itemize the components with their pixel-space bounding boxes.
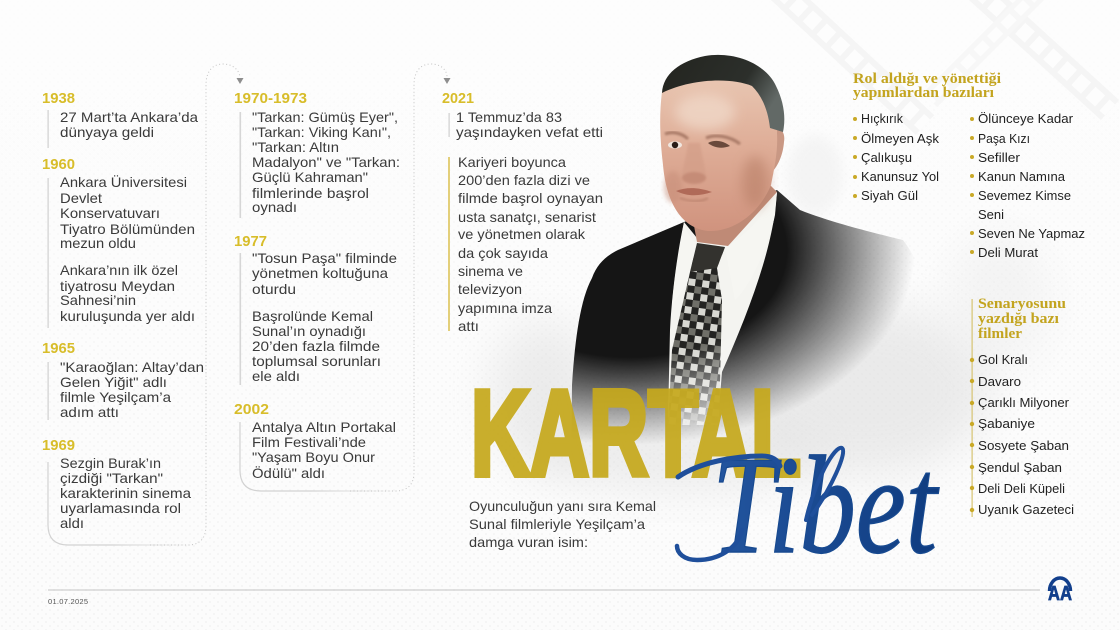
- film list column 2: Kanun Namına: [978, 169, 1066, 184]
- timeline entry 1977: "Tosun Paşa" filminde: [252, 251, 397, 266]
- film list column 2: Seven Ne Yapmaz: [978, 226, 1085, 241]
- timeline entry 1977: 20’den fazla filmde: [252, 339, 380, 354]
- footer date and rule: 01.07.2025: [48, 597, 88, 606]
- timeline entry 1938: [42, 91, 198, 148]
- film list column 2: Deli Murat: [978, 245, 1038, 260]
- timeline entry 1977: toplumsal sorunları: [252, 354, 381, 369]
- panel: screenplays: Deli Deli Küpeli: [978, 481, 1065, 496]
- timeline entry 1970-1973: oynadı: [252, 200, 297, 215]
- panel: screenplays: Sosyete Şaban: [978, 438, 1069, 453]
- timeline entry 1965: "Karaoğlan: Altay’dan: [60, 360, 204, 375]
- timeline entry 1977: oturdu: [252, 282, 296, 297]
- career summary: televizyon: [458, 282, 522, 297]
- timeline entry 1969: Sezgin Burak’ın: [60, 456, 161, 471]
- timeline entry 1960: kuruluşunda yer aldı: [60, 309, 195, 324]
- icon: AA logo: AA: [1048, 583, 1072, 605]
- timeline entry 1938: 1938: [42, 91, 75, 107]
- timeline entry 1960: [42, 157, 195, 328]
- timeline entry 1969: uyarlamasında rol: [60, 501, 181, 516]
- timeline entry 1970-1973: [234, 91, 400, 218]
- career summary: 200’den fazla dizi ve: [458, 173, 590, 188]
- panel: screenplays: [970, 296, 1074, 517]
- career summary: ve yönetmen olarak: [458, 227, 585, 242]
- timeline entry 2002: "Yaşam Boyu Onur: [252, 450, 375, 465]
- timeline entry 1960: Sahnesi’nin: [60, 293, 136, 308]
- subtitle: Sunal filmleriyle Yeşilçam’a: [469, 517, 645, 532]
- shirt: [668, 192, 777, 396]
- timeline entry 1969: 1969: [42, 438, 75, 454]
- neck: [692, 180, 777, 246]
- script flourishes: [677, 448, 843, 560]
- film list column 1: Kanunsuz Yol: [861, 169, 939, 184]
- film list column 2: Sefiller: [978, 150, 1021, 165]
- film list column 2: Seni: [978, 207, 1004, 222]
- timeline entry 1965: Gelen Yiğit" adlı: [60, 375, 167, 390]
- career summary: attı: [458, 319, 479, 334]
- timeline entry 2002: Film Festivali’nde: [252, 435, 366, 450]
- timeline connector 1: [48, 64, 244, 545]
- timeline entry 1977: yönetmen koltuğuna: [252, 266, 388, 281]
- heading: films acted and directed: yapımlardan bazıları: [853, 85, 994, 101]
- timeline entry 1970-1973: filmlerinde başrol: [252, 186, 369, 201]
- hair: [662, 55, 784, 132]
- panel: screenplays: Çarıklı Milyoner: [978, 395, 1070, 410]
- film list column 1: Hıçkırık: [861, 111, 903, 126]
- icon: AA logo: [1048, 578, 1072, 605]
- film list column 1: Siyah Gül: [861, 188, 918, 203]
- timeline entry 2021: [442, 91, 603, 140]
- career summary: Kariyeri boyunca: [458, 155, 566, 170]
- timeline entry 2002: Ödülü" aldı: [252, 464, 325, 481]
- timeline entry 2021: 2021: [442, 91, 474, 107]
- timeline entry 1965: adım attı: [60, 405, 119, 420]
- timeline entry 1970-1973: 1970-1973: [234, 91, 307, 107]
- tie knot: [690, 243, 725, 272]
- face shading: [664, 94, 768, 208]
- career summary: filmde başrol oynayan: [458, 191, 603, 206]
- subtitle: Oyunculuğun yanı sıra Kemal: [469, 499, 656, 514]
- timeline entry 1970-1973: "Tarkan: Gümüş Eyer",: [252, 110, 398, 125]
- heading: films acted and directed: [853, 71, 1001, 101]
- career summary: [448, 155, 603, 334]
- panel: screenplays: Senaryosunu: [978, 296, 1066, 312]
- timeline entry 1970-1973: "Tarkan: Viking Kanı",: [252, 125, 391, 140]
- timeline entry 1960: tiyatrosu Meydan: [60, 279, 175, 294]
- film list column 2: Ölünceye Kadar: [978, 111, 1074, 126]
- shirt collar right: [725, 192, 777, 300]
- timeline entry 1977: 1977: [234, 234, 267, 250]
- film list column 2: Sevemez Kimse: [978, 188, 1071, 203]
- timeline entry 2002: Antalya Altın Portakal: [252, 420, 396, 435]
- necktie: [668, 244, 725, 425]
- timeline entry 1977: Sunal’ın oynadığı: [252, 324, 366, 339]
- timeline entry 1970-1973: Madalyon" ve "Tarkan:: [252, 155, 400, 170]
- timeline entry 1960: 1960: [42, 157, 75, 173]
- timeline entry 1960: Devlet: [60, 191, 102, 206]
- panel: screenplays: yazdığı bazı: [978, 311, 1059, 327]
- panel: screenplays: Uyanık Gazeteci: [978, 502, 1074, 517]
- timeline entry 2021: yaşındayken vefat etti: [456, 125, 603, 140]
- film list column 1: [853, 111, 939, 203]
- timeline entry 2021: 1 Temmuz’da 83: [456, 110, 562, 125]
- panel: screenplays: Davaro: [978, 374, 1021, 389]
- timeline entry 1970-1973: Güçlü Kahraman": [252, 170, 368, 185]
- timeline entry 1960: mezun oldu: [60, 236, 136, 251]
- timeline entry 1969: çizdiği "Tarkan": [60, 471, 163, 486]
- timeline entry 1977: [234, 234, 397, 385]
- film list column 1: Ölmeyen Aşk: [861, 131, 939, 146]
- suit: [572, 190, 910, 442]
- career summary: da çok sayıda: [458, 246, 548, 261]
- career summary: yapımına imza: [458, 301, 552, 316]
- timeline entry 1960: Ankara Üniversitesi: [60, 173, 187, 190]
- timeline entry 1969: [42, 438, 191, 531]
- portrait of Kartal Tibet: [572, 54, 910, 442]
- timeline entry 1969: karakterinin sinema: [60, 486, 191, 501]
- face: [660, 72, 777, 231]
- timeline entry 1977: ele aldı: [252, 369, 300, 384]
- name: Tibet: Tibet: [712, 428, 939, 583]
- timeline entry 1938: 27 Mart’ta Ankara’da: [60, 110, 198, 125]
- film list column 2: Paşa Kızı: [978, 131, 1030, 146]
- film list column 2: [970, 111, 1085, 260]
- film list column 1: Çalıkuşu: [861, 150, 912, 165]
- timeline entry 1977: Başrolünde Kemal: [252, 309, 373, 324]
- timeline entry 1960: Ankara’nın ilk özel: [60, 263, 178, 278]
- panel: screenplays: Gol Kralı: [978, 352, 1028, 367]
- timeline entry 1960: Tiyatro Bölümünden: [60, 222, 195, 237]
- timeline entry 1965: 1965: [42, 341, 75, 357]
- name: KARTAL: KARTAL: [471, 365, 801, 501]
- panel: screenplays: Şendul Şaban: [978, 460, 1062, 475]
- career summary: usta sanatçı, senarist: [458, 210, 596, 225]
- ear: [770, 128, 784, 172]
- timeline entry 1960: Konservatuvarı: [60, 206, 160, 221]
- timeline connector 2: [240, 64, 450, 491]
- timeline entry 1938: dünyaya geldi: [60, 125, 154, 140]
- timeline entry 2002: [234, 402, 396, 481]
- timeline entry 1965: [42, 341, 204, 420]
- film strip decoration: [780, 0, 1110, 125]
- smoke wash behind portrait: [490, 135, 1050, 490]
- subtitle: [469, 499, 656, 550]
- timeline entry 2002: 2002: [234, 402, 269, 418]
- shirt collar left: [672, 222, 697, 305]
- timeline entry 1965: filmle Yeşilçam’a: [60, 390, 171, 405]
- timeline entry 1969: aldı: [60, 516, 84, 531]
- career summary: sinema ve: [458, 264, 523, 279]
- timeline entry 1970-1973: "Tarkan: Altın: [252, 140, 339, 155]
- panel: screenplays: Şabaniye: [978, 416, 1035, 431]
- heading: films acted and directed: Rol aldığı ve yönettiği: [853, 71, 1001, 87]
- panel: screenplays: filmler: [978, 326, 1022, 342]
- subtitle: damga vuran isim:: [469, 535, 588, 550]
